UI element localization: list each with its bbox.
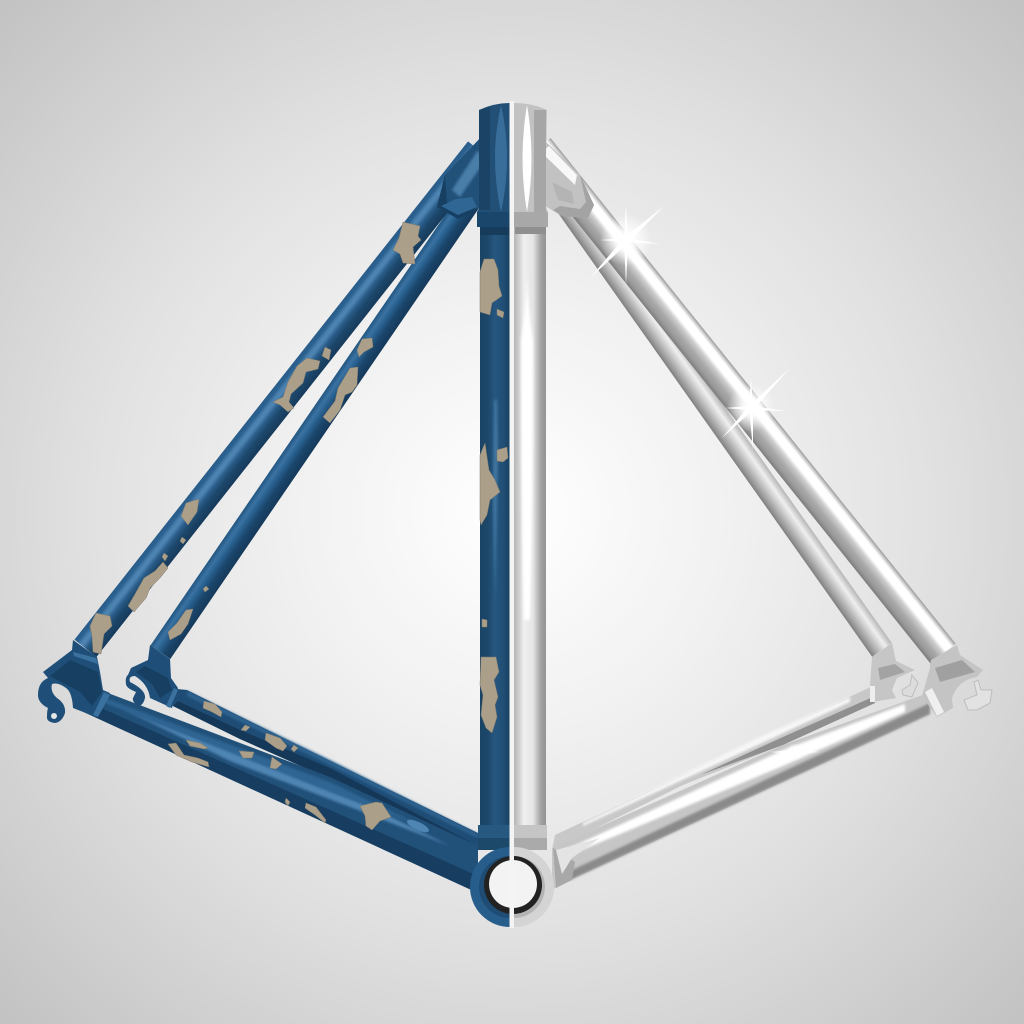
silver seat tube: [514, 222, 546, 827]
polished silver half of frame: [514, 103, 992, 927]
silver outer dropout: [922, 645, 992, 717]
blue inner dropout: [126, 645, 178, 708]
silver bottom bracket half: [514, 847, 554, 927]
blue outer chainstay: [75, 690, 478, 893]
blue head lug: [477, 103, 510, 235]
blue outer seat stay: [74, 141, 490, 657]
blue bottom bracket half: [470, 847, 510, 927]
blue painted half of frame: [38, 103, 510, 927]
patches on outer seat stay: [90, 222, 421, 654]
patches on seat tube: [480, 259, 508, 733]
silver seat stay junction lug: [540, 136, 594, 218]
silver outer chainstay: [552, 693, 930, 890]
blue seat tube: [480, 222, 510, 827]
sparkle: lower highlight: [722, 368, 790, 450]
silver inner seat stay: [557, 198, 892, 657]
silver inner chainstay: [552, 685, 875, 850]
silver inner dropout: [870, 643, 918, 702]
bottom bracket ring: [479, 856, 545, 918]
blue seat stay junction lug: [437, 134, 484, 219]
blue inner seat stay: [150, 193, 480, 659]
patches on outer chainstay: [168, 740, 391, 830]
silver head lug: [514, 103, 548, 234]
patches on inner seat stay: [168, 338, 373, 640]
centre dividing line: [510, 101, 514, 928]
blue inner chainstay: [168, 688, 478, 858]
blue outer dropout: [38, 640, 110, 723]
silver lower collar: [514, 825, 547, 850]
blue lower collar: [478, 825, 510, 850]
sparkle: stay glint: [770, 743, 820, 761]
patches on inner chainstay: [203, 701, 298, 752]
silver outer seat stay: [526, 138, 956, 664]
peeling paint patches: [90, 222, 508, 830]
sparkle: upper highlight: [590, 205, 664, 285]
